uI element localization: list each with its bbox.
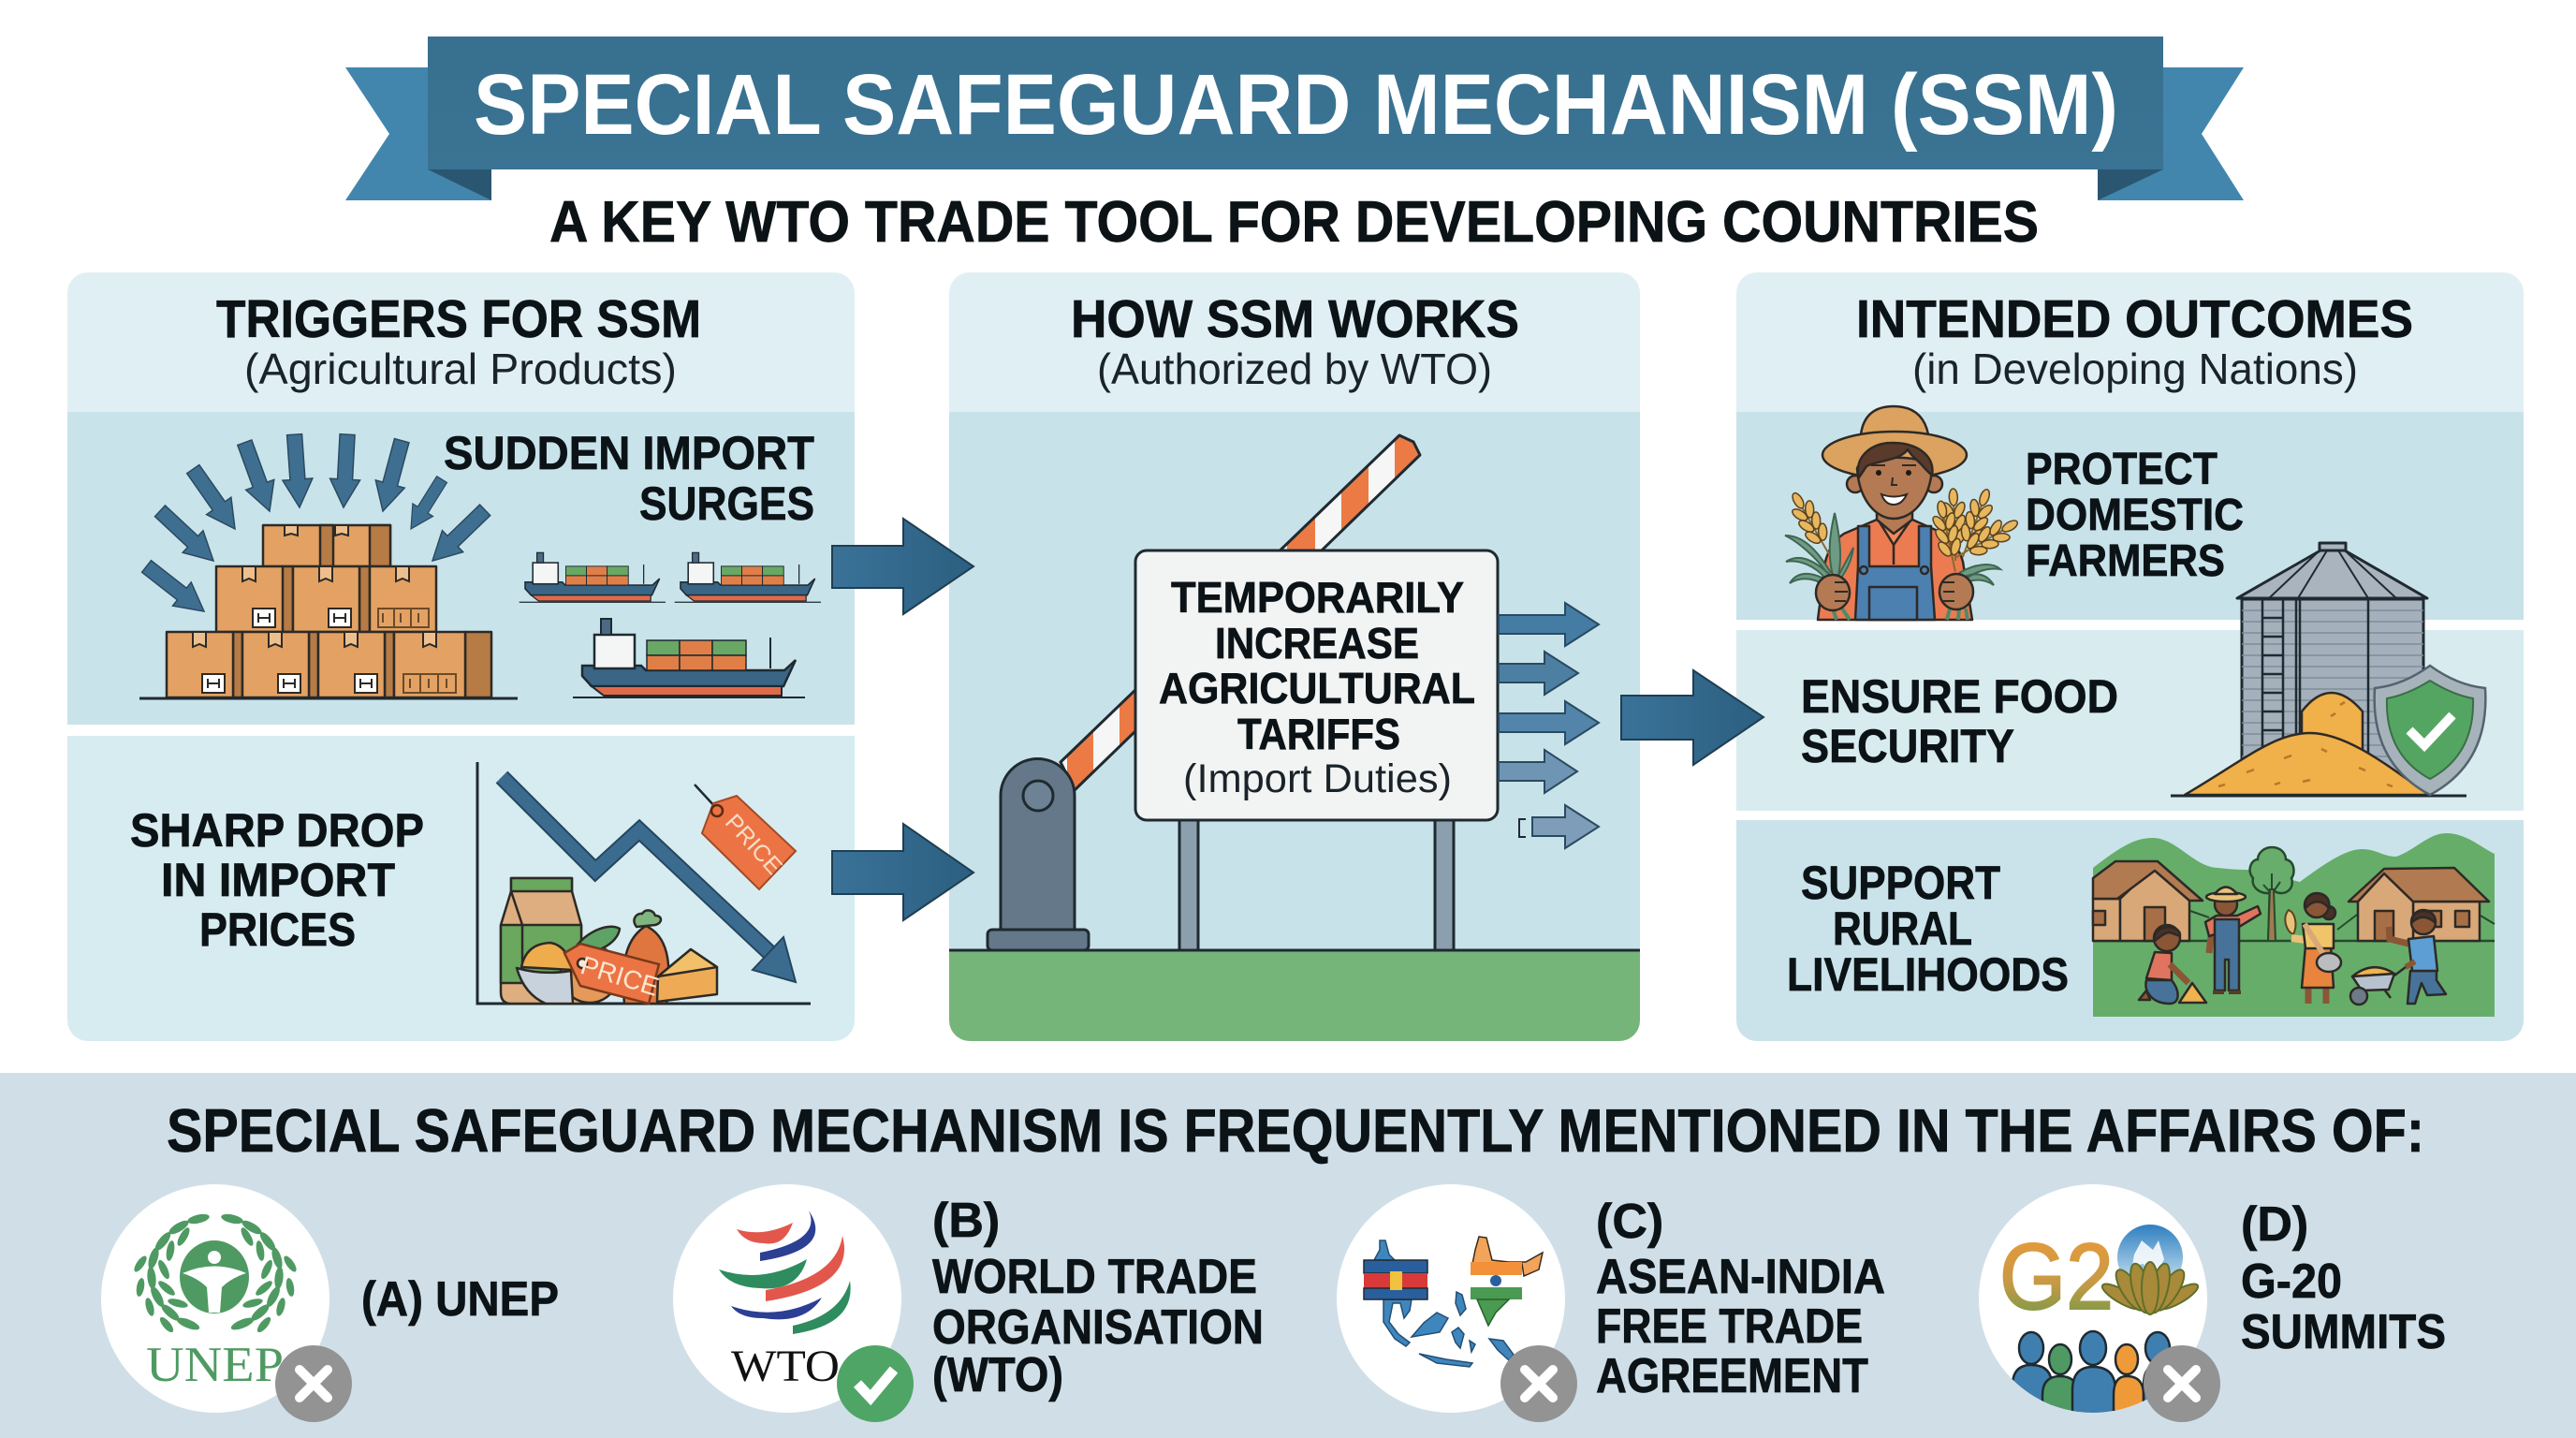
icon: tariff flow arrows xyxy=(1499,603,1599,848)
label: sudden import surges: SURGES xyxy=(639,477,814,530)
arrow: how it works to outcomes xyxy=(1621,670,1764,765)
icon: barrier post xyxy=(988,758,1089,950)
panel: intended outcomes xyxy=(1736,272,2524,1041)
label: (D) G-20 summits xyxy=(2241,1197,2446,1359)
label: (C) ASEAN-India FTA: ASEAN-INDIA xyxy=(1596,1250,1885,1304)
icon: grain silo xyxy=(2171,543,2466,796)
label: support rural livelihoods: LIVELIHOODS xyxy=(1787,948,2069,1001)
logo: G20: G2 xyxy=(1999,1225,2114,1329)
icon: people group xyxy=(2012,1331,2176,1418)
heading: how SSM works: HOW SSM WORKS xyxy=(1071,289,1519,349)
option C: ASEAN-India FTA xyxy=(1337,1184,1885,1422)
label: (D) G-20 summits: SUMMITS xyxy=(2241,1305,2446,1359)
label: sudden import surges xyxy=(444,427,814,530)
label: (C) ASEAN-India FTA: (C) xyxy=(1596,1195,1663,1249)
icon: container ship 2 xyxy=(675,552,821,602)
label: (B) World Trade Organisation: WORLD TRADE xyxy=(932,1250,1257,1304)
label: protect domestic farmers xyxy=(2026,445,2244,586)
label: (A) UNEP: (A) UNEP xyxy=(361,1272,559,1327)
label: sharp drop in import prices: PRICES xyxy=(199,903,356,956)
logo: G20 xyxy=(1999,1225,2201,1329)
label: protect domestic farmers: FARMERS xyxy=(2026,536,2225,586)
badge: incorrect xyxy=(2144,1345,2220,1422)
sign: temporarily increase tariffs: INCREASE xyxy=(1215,619,1419,668)
panel: triggers for SSM xyxy=(67,272,855,1041)
subtitle: A KEY WTO TRADE TOOL FOR DEVELOPING COUNTRIES xyxy=(549,190,2039,255)
label: sharp drop in import prices: SHARP DROP xyxy=(130,804,424,857)
label: (C) ASEAN-India FTA xyxy=(1596,1195,1885,1403)
badge: incorrect xyxy=(1500,1345,1577,1422)
icon: farmer xyxy=(1782,406,2024,620)
arrow: price drop to how it works xyxy=(832,824,973,920)
sign: temporarily increase tariffs: AGRICULTURAL xyxy=(1159,664,1475,712)
label: support rural livelihoods: SUPPORT xyxy=(1801,857,2000,909)
title text: SPECIAL SAFEGUARD MECHANISM (SSM) xyxy=(474,57,2118,153)
label: protect domestic farmers: DOMESTIC xyxy=(2026,491,2244,540)
badge: incorrect xyxy=(275,1345,352,1422)
icon: ASEAN India map xyxy=(1364,1237,1543,1367)
icon: price tag xyxy=(695,785,796,889)
logo: UNEP wreath xyxy=(132,1212,299,1334)
label: (C) ASEAN-India FTA: AGREEMENT xyxy=(1596,1349,1868,1403)
label: ensure food security xyxy=(1801,670,2118,772)
badge: correct xyxy=(837,1345,914,1422)
sign: temporarily increase tariffs xyxy=(1135,550,1498,820)
icon: food goods xyxy=(501,878,717,1004)
label: support rural livelihoods xyxy=(1787,857,2069,1001)
label: sharp drop in import prices: IN IMPORT xyxy=(161,854,395,906)
label: ensure food security: ENSURE FOOD xyxy=(1801,670,2118,723)
label: protect domestic farmers: PROTECT xyxy=(2026,445,2217,494)
icon: stacked boxes xyxy=(139,525,518,698)
label: (B) World Trade Organisation xyxy=(932,1194,1264,1402)
label: (B) World Trade Organisation: (B) xyxy=(932,1194,1000,1248)
chart: falling price line xyxy=(477,762,811,1004)
icon: inward arrows xyxy=(138,433,495,624)
panel: how SSM works xyxy=(949,272,1640,1041)
logo: WTO rings xyxy=(719,1211,851,1334)
icon: price tag: PRICE xyxy=(720,809,787,880)
sign: temporarily increase tariffs: TEMPORARILY xyxy=(1171,573,1464,622)
icon: sign posts xyxy=(1179,820,1454,950)
icon: food goods: PRICE xyxy=(578,950,663,1002)
heading: triggers: TRIGGERS FOR SSM xyxy=(216,289,701,349)
title banner xyxy=(345,37,2244,200)
label: sharp drop in import prices xyxy=(130,804,424,956)
label: (D) G-20 summits: G-20 xyxy=(2241,1255,2342,1309)
sign: temporarily increase tariffs: TARIFFS xyxy=(1237,710,1400,758)
icon: container ship 3 xyxy=(573,619,805,697)
panel: frequently mentioned xyxy=(0,1073,2576,1438)
label: (C) ASEAN-India FTA: FREE TRADE xyxy=(1596,1299,1863,1354)
people: villagers working xyxy=(2139,888,2446,1005)
icon: container ship 1 xyxy=(520,552,666,602)
option B: WTO xyxy=(673,1184,1264,1422)
logo text: UNEP: UNEP xyxy=(146,1338,284,1392)
subheading: authorized by WTO: (Authorized by WTO) xyxy=(1097,345,1492,393)
heading: intended outcomes: INTENDED OUTCOMES xyxy=(1856,289,2413,349)
label: ensure food security: SECURITY xyxy=(1801,720,2014,772)
label: support rural livelihoods: RURAL xyxy=(1833,902,1972,955)
sign: temporarily increase tariffs: (Import Duties) xyxy=(1183,756,1452,801)
subheading: in developing nations: (in Developing Nations) xyxy=(1912,345,2358,393)
label: (B) World Trade Organisation: (WTO) xyxy=(932,1348,1063,1402)
label: sudden import surges: SUDDEN IMPORT xyxy=(444,427,814,479)
icon: green shield xyxy=(2375,666,2485,795)
label: (D) G-20 summits: (D) xyxy=(2241,1197,2308,1252)
option D: G-20 summits xyxy=(1979,1184,2446,1422)
logo text: WTO: WTO xyxy=(731,1342,840,1391)
arrow: surges to how it works xyxy=(832,519,973,614)
label: (B) World Trade Organisation: ORGANISATION xyxy=(932,1300,1264,1355)
option A: UNEP xyxy=(101,1184,559,1422)
illustration: rural village xyxy=(2093,833,2495,1017)
subheading: agricultural products: (Agricultural Products) xyxy=(244,345,677,393)
icon: barrier arm xyxy=(1060,434,1421,791)
